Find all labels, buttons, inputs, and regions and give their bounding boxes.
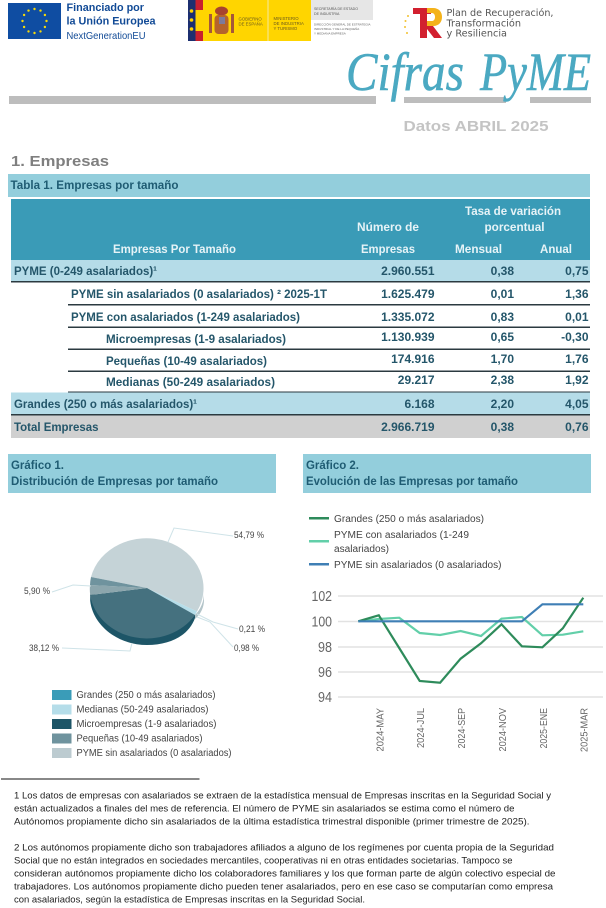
panel: Gráfico 1 heading [8,454,276,493]
row: Medianas: 2,38 [491,373,514,387]
x axis labels: 2025-MAR [580,708,590,752]
row: Medianas [106,373,589,389]
table header [11,199,590,260]
series: PYME sin asalariados [358,604,583,621]
legend: pie chart: Grandes (250 o más asalariados) [76,690,216,701]
panel: Gráfico 2 heading: Evolución de las Empresas por tamaño [306,474,518,488]
logo: Financiado por la Unión Europea: Financiado por [66,2,145,14]
row: Pequeñas [106,352,589,368]
footnote rule [1,778,200,780]
row: Grandes: Grandes (250 o más asalariados)¹ [14,397,197,411]
y axis labels: 100 [312,614,332,630]
slice: Pequeñas 5,90 % [90,577,147,595]
x axis labels: 2024-NOV [498,708,509,752]
table header: Empresas [361,242,415,256]
subtitle: Datos ABRIL 2025: Datos ABRIL 2025 [404,119,548,135]
legend: line chart [309,514,502,571]
row: PYME sin asalariados [71,287,589,301]
panel: Gráfico 1 heading: Gráfico 1. [11,458,64,472]
panel: Gráfico 1 heading: Distribución de Empresas por tamaño [11,474,218,488]
legend: pie chart: PYME sin asalariados (0 asalariados) [76,748,232,759]
x axis labels [376,708,590,752]
footnote 2: trabajadores. Los autónomos propiamente dicho pueden tener asalariados, pero en ese caso se computarían como empresa [14,882,554,892]
footnote 2: consideran autónomos propiamente dicho los colaboradores familiares y los que forman parte de algún colectivo especial de [14,868,556,880]
y axis labels: 102 [312,589,332,605]
legend: pie chart: Medianas (50-249 asalariados) [76,704,208,716]
row: PYME sin asalariados: 1.625.479 [381,287,435,301]
panel: Gráfico 2 heading: Gráfico 2. [306,458,359,472]
logo: Financiado por la Unión Europea: la Unión Europea [66,16,156,28]
row: PYME total: 2.960.551 [381,264,435,278]
pie labels: 54,79 % [234,530,264,540]
row: Pequeñas: 1,70 [491,352,514,366]
footnote 1: 1 Los datos de empresas con asalariados se extraen de la estadística mensual de Empresas inscritas en la Seguridad Social y [14,790,551,802]
logo: Gobierno de España: INDUSTRIAL Y DE LA PEQUEÑA [314,26,359,31]
row: PYME sin asalariados: PYME sin asalariados (0 asalariados) ² 2025-1T [71,287,328,301]
logo: Plan de Recuperación: Transformación [445,18,521,30]
row: Total Empresas: 0,76 [565,420,589,434]
row: Microempresas: 0,65 [491,330,514,344]
row: Total Empresas: Total Empresas [14,420,99,434]
pie labels: 38,12 % [29,643,59,653]
line chart: evolution [312,589,603,752]
row: PYME con asalariados: 1.335.072 [381,310,435,324]
footnote 1: Autónomos propiamente dicho sin asalariados de la última estadística trimestral disponible (primer trimestre de 2025). [14,816,530,828]
row: PYME total: 0,38 [491,264,514,278]
panel: Gráfico 2 heading [303,454,591,493]
row: Medianas: 1,92 [565,373,589,387]
legend: pie chart: Pequeñas (10-49 asalariados) [76,734,202,744]
legend: pie chart [52,690,232,759]
table header: porcentual [484,220,544,234]
row: PYME con asalariados: 0,83 [491,310,514,324]
logo: Gobierno de España: DE INDUSTRIA [314,12,340,16]
header grey rule [9,96,591,104]
logo: Gobierno de España: GOBIERNO [238,16,262,22]
footnote 1: están actualizados a finales del mes de referencia. El número de PYME sin asalariados se estima como el número de [14,804,514,814]
panel: table title bar: Tabla 1. Empresas por tamaño [10,178,178,192]
logo: Gobierno de España: DIRECCIÓN GENERAL DE ESTRATEGIA [314,22,371,26]
table header: Número de [357,220,419,234]
row: Microempresas [106,330,589,346]
panel: table title bar [8,174,590,197]
row: Grandes: 2,20 [491,397,514,411]
row: Total Empresas: 2.966.719 [381,420,435,434]
pie labels: 0,98 % [234,643,259,653]
logo: Financiado por la Unión Europea [8,2,156,42]
legend: line chart: PYME con asalariados (1-249 [334,530,469,541]
legend: line chart: PYME sin asalariados (0 asalariados) [334,560,502,571]
row: Pequeñas: Pequeñas (10-49 asalariados) [106,354,267,368]
footnote 1 [14,790,551,828]
row: Total Empresas: 0,38 [491,420,514,434]
row: Medianas: 29.217 [398,373,435,387]
row: Total Empresas [11,416,590,438]
x axis labels: 2024-MAY [376,708,386,752]
row: Grandes: 4,05 [565,397,589,411]
table: Empresas por tamaño [11,199,590,438]
table header: Mensual [455,242,502,256]
pie labels [24,530,265,653]
logo: Gobierno de España [188,0,373,41]
row: PYME con asalariados: 0,01 [565,310,589,324]
y axis labels: 94 [318,690,332,706]
series: PYME con asalariados [358,617,583,636]
logo: Plan de Recuperación: y Resiliencia [446,28,507,40]
row: PYME total [11,260,590,282]
row: PYME con asalariados: PYME con asalariados (1-249 asalariados) [71,310,300,324]
logo: Gobierno de España: Y TURISMO [274,26,298,31]
leader lines [52,528,238,651]
logo: Financiado por la Unión Europea: NextGenerationEU [66,30,146,42]
row: PYME sin asalariados: 0,01 [491,287,514,301]
y axis labels [312,589,332,706]
table header: Empresas Por Tamaño [113,242,236,256]
row: PYME con asalariados [71,310,589,324]
row: Microempresas: Microempresas (1-9 asalariados) [106,332,286,346]
logo: Gobierno de España: Y MEDIANA EMPRESA [314,32,346,36]
logo: Plan de Recuperación: Plan de Recuperación, [446,8,554,19]
footnote 2 [14,842,556,906]
row: PYME total: PYME (0-249 asalariados)¹ [14,264,157,278]
x axis labels: 2024-JUL [416,708,427,748]
slice: PYME sin asalariados 54,79 % [91,538,204,612]
logo: Gobierno de España: DE INDUSTRIA [274,21,304,26]
logo: Gobierno de España: DE ESPAÑA [238,22,263,26]
pie labels: 0,21 % [239,624,265,634]
row: Pequeñas: 174.916 [391,352,435,366]
x axis labels: 2024-SEP [457,708,468,748]
row: Medianas: Medianas (50-249 asalariados) [106,375,275,389]
row: PYME sin asalariados: 1,36 [565,287,589,301]
row: Grandes [11,392,590,414]
y axis labels: 96 [318,665,332,681]
row: Pequeñas: 1,76 [565,352,589,366]
y axis labels: 98 [318,640,332,656]
heading: 1. Empresas: 1. Empresas [11,153,109,170]
footnote 2: con asalariados, según la estadística de Empresas inscritas en la Seguridad Social. [14,894,365,906]
series: Grandes [358,598,583,683]
logo: Plan de Recuperación [404,8,554,40]
title: Cifras PyME: Cifras [346,42,464,102]
legend: line chart: Grandes (250 o más asalariados) [334,514,484,525]
table header: Anual [540,242,572,256]
slice: Medianas 0,98 % [147,588,197,615]
row: Microempresas: 1.130.939 [381,330,435,344]
row: PYME total: 0,75 [565,264,589,278]
legend: line chart: asalariados) [334,544,389,555]
table header: Tasa de variación [465,204,561,218]
footnote 2: Social que no están integrados en sociedades mercantiles, cooperativas ni en otras entidades societarias. Tampoco se [14,856,512,866]
row: Grandes: 6.168 [404,397,435,411]
row: Microempresas: -0,30 [561,330,589,344]
footnote 2: 2 Los autónomos propiamente dicho son trabajadores afiliados a alguno de los regímenes por cuenta propia de la Seguridad [14,842,554,854]
pie chart: distribution [24,528,265,653]
slice: Microempresas 38,12 % [90,588,195,638]
icon: coat of arms [209,6,234,34]
logo: Gobierno de España: SECRETARÍA DE ESTADO [314,7,358,11]
legend: pie chart: Microempresas (1-9 asalariados) [76,719,216,730]
logo: Gobierno de España: MINISTERIO [274,16,299,21]
title: Cifras PyME [346,42,591,102]
pie depth [90,593,204,645]
pie labels: 5,90 % [24,586,50,596]
x axis labels: 2025-ENE [539,708,550,748]
